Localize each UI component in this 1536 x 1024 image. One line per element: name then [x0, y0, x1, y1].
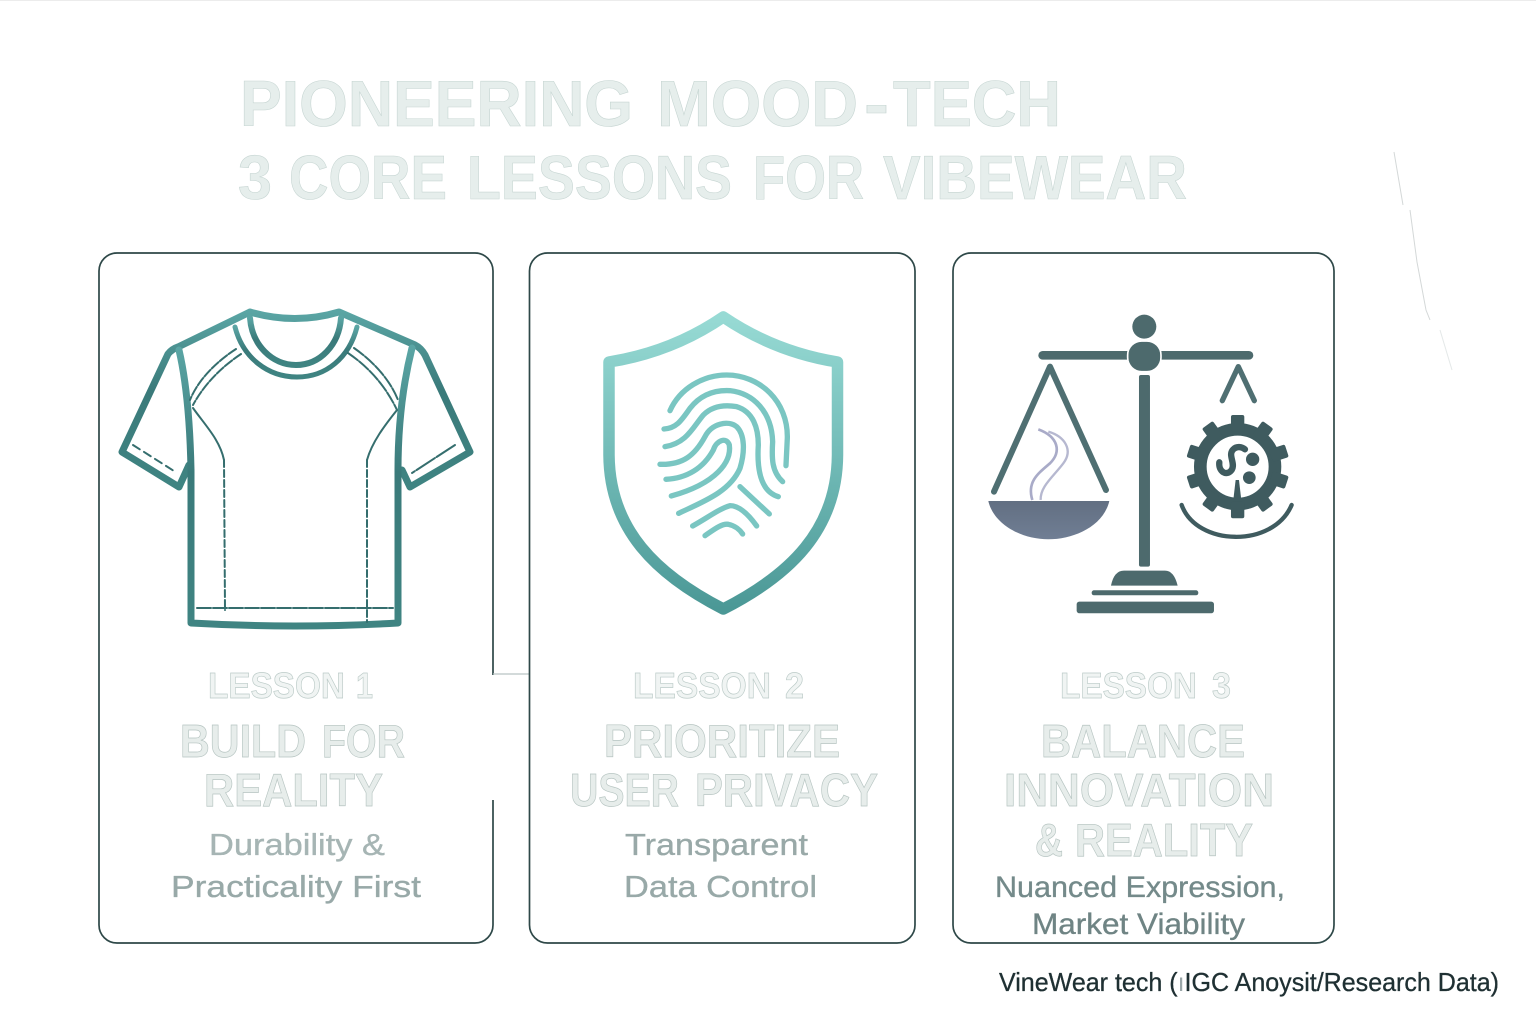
decorative scratch marks [1394, 152, 1452, 370]
icon: shield with fingerprint [609, 317, 838, 609]
lesson label 1: LESSON [208, 665, 345, 706]
heading 3: BALANCE [1041, 715, 1245, 767]
lesson label 1: 1 [356, 665, 373, 706]
description 1: Durability & [209, 827, 385, 862]
heading 2: PRIVACY [695, 764, 878, 816]
lesson label 2: 2 [785, 665, 804, 706]
title: MOOD [657, 67, 858, 140]
heading 1 [180, 715, 405, 816]
scale bowl with steam [988, 429, 1109, 539]
description 2: Data Control [624, 869, 817, 904]
lesson label 2: LESSON [633, 665, 771, 706]
description 3: Nuanced Expression, [995, 871, 1285, 904]
description 3: Market Viability [1032, 908, 1245, 941]
icon: t-shirt [122, 312, 470, 626]
title: PIONEERING [240, 67, 633, 140]
title: TECH [893, 67, 1061, 140]
heading 1: FOR [322, 715, 405, 767]
heading 3: REALITY [1075, 814, 1253, 866]
title: CORE [289, 144, 447, 213]
heading 1: BUILD [180, 715, 306, 767]
title: 3 [238, 144, 272, 213]
description 2: Transparent [625, 827, 808, 862]
heading 3: INNOVATION [1004, 764, 1274, 816]
description 3 [995, 871, 1285, 941]
title: - [864, 67, 889, 140]
lesson label 3: 3 [1212, 665, 1231, 706]
icon: balance scale [988, 315, 1292, 613]
connector [493, 673, 529, 675]
description 1 [171, 827, 421, 904]
card outline 2 [530, 253, 915, 943]
panel: lesson 2 [530, 253, 915, 943]
description 2 [624, 827, 817, 904]
heading 2: USER [570, 764, 679, 816]
description 1: Practicality First [171, 869, 421, 904]
heading 3: & [1035, 814, 1063, 866]
heading 3 [1004, 715, 1274, 866]
source caption: VineWear tech (ıIGC Anoysit/Research Data) [999, 967, 1499, 997]
title: FOR [753, 144, 864, 213]
panel: lesson 1 [99, 253, 529, 943]
title: LESSONS [467, 144, 732, 213]
gear [1182, 415, 1292, 537]
heading 2: PRIORITIZE [604, 715, 840, 767]
card outline 1 [99, 253, 493, 943]
lesson label 3: LESSON [1060, 665, 1197, 706]
title: VIBEWEAR [883, 144, 1187, 213]
heading 2 [570, 715, 878, 816]
panel: lesson 3 [953, 253, 1334, 943]
heading 1: REALITY [204, 764, 383, 816]
card outline 3 [953, 253, 1334, 943]
title [238, 67, 1187, 213]
